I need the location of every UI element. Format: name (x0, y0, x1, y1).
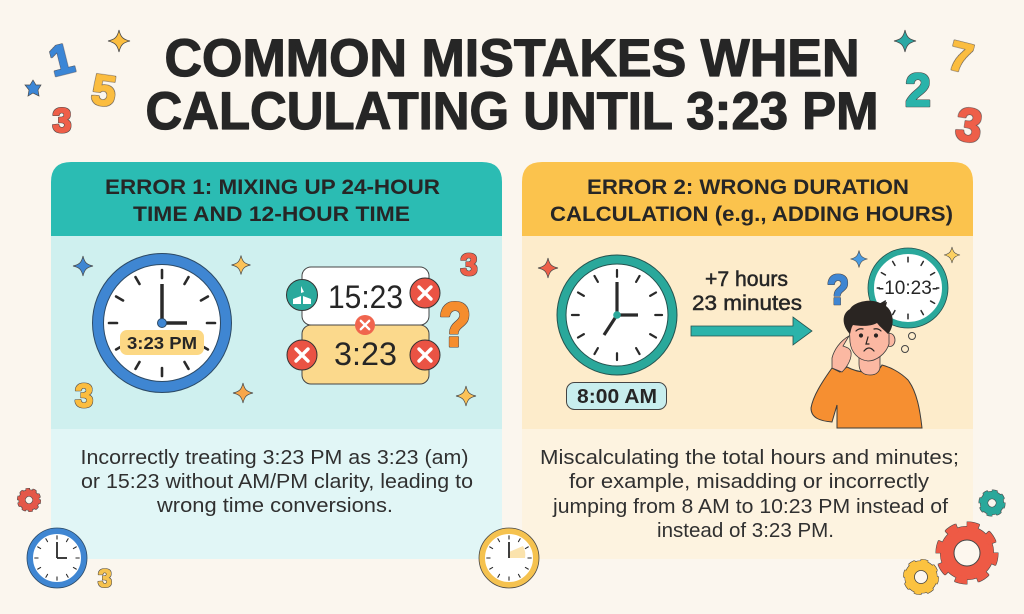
panel 1 heading (105, 176, 440, 226)
title (146, 29, 878, 141)
decorative numbers and stars, top left: 1 (44, 34, 78, 85)
panel 1 description: or 15:23 without AM/PM clarity, leading to (81, 471, 473, 493)
icon: teal gear (980, 492, 1004, 514)
icon: blue question mark: ? (827, 266, 849, 313)
person head (849, 322, 889, 361)
person hand (832, 336, 851, 372)
clock showing wrong 10:23: -10:23- (878, 278, 938, 299)
added duration label: 23 minutes (692, 292, 802, 315)
decorative numbers: 3 (460, 247, 478, 282)
panel 1 illustration background (51, 230, 502, 429)
panel 2 description (540, 447, 959, 542)
panel 2 heading: CALCULATION (e.g., ADDING HOURS) (550, 203, 953, 226)
clock showing wrong 10:23 (868, 248, 948, 328)
gold number 3, bottom left: 3 (98, 565, 112, 593)
panel 2 description: instead of 3:23 PM. (657, 520, 834, 542)
decorative numbers: 3 (75, 377, 93, 414)
title: CALCULATING UNTIL 3:23 PM (146, 82, 878, 141)
clock showing 8:00 AM start (557, 255, 677, 375)
panel 2 illustration background (522, 230, 973, 429)
panel 1 text background (51, 425, 502, 559)
panel 1 header (51, 162, 502, 236)
panel 1 description: wrong time conversions. (156, 495, 393, 517)
person face (856, 329, 881, 351)
small blue clock, bottom left (27, 528, 87, 588)
panel: error 2 (522, 162, 973, 559)
person ear (885, 334, 895, 346)
panel 2 description: for example, misadding or incorrectly (569, 471, 929, 493)
panel 2 description: Miscalculating the total hours and minutes; (540, 447, 959, 469)
decorative numbers and stars, top right: 7 (944, 32, 977, 82)
thought bubbles (902, 332, 916, 352)
3:23 card: 3:23 (334, 336, 397, 372)
panel 2 heading: ERROR 2: WRONG DURATION (587, 176, 909, 199)
small gold clock, bottom centre (479, 528, 539, 588)
decorative numbers and stars, top left: 5 (89, 66, 119, 116)
panel 2 text background (522, 425, 973, 559)
panel 1 heading: TIME AND 12-HOUR TIME (133, 203, 410, 226)
icon: wrong marks (287, 278, 440, 370)
person thinking (811, 301, 922, 428)
icon: small red gear (19, 490, 39, 510)
title: COMMON MISTAKES WHEN (164, 29, 860, 88)
icon: orange question mark: ? (439, 291, 471, 360)
decorative numbers and stars, top right: 3 (953, 97, 985, 153)
clock showing 3:23 PM: 3:23 PM (127, 333, 197, 353)
panel 1 description: Incorrectly treating 3:23 PM as 3:23 (am) (80, 447, 468, 469)
15:23 card: 15:23 (328, 279, 403, 315)
decorative numbers (75, 247, 478, 414)
panel 2 header (522, 162, 973, 236)
icon: teal book badge (286, 280, 318, 310)
decorative numbers and stars, top left (25, 30, 130, 140)
15:23 card (302, 267, 429, 325)
clock showing 3:23 PM (92, 254, 232, 392)
sparkles (73, 256, 476, 406)
panel 2 description: jumping from 8 AM to 10:23 PM instead of (552, 496, 948, 518)
arrow (691, 317, 812, 345)
decorative numbers and stars, top right (894, 30, 985, 153)
panel 1 description (80, 447, 473, 517)
3:23 card (302, 325, 429, 384)
added duration label (692, 268, 802, 315)
panel 2 heading (550, 176, 953, 226)
decorative numbers and stars, top right: 2 (905, 64, 931, 116)
panel 1 heading: ERROR 1: MIXING UP 24-HOUR (105, 176, 440, 199)
sparkles (538, 247, 960, 278)
added duration label: +7 hours (705, 268, 788, 291)
panel: error 1 (51, 162, 502, 559)
icon: large red gear (940, 526, 994, 580)
person sweater (811, 365, 922, 428)
person neck (859, 352, 880, 375)
8:00 AM label (566, 382, 666, 410)
8:00 AM label: 8:00 AM (577, 385, 657, 408)
person hair (844, 301, 893, 334)
icon: gold gear (906, 562, 936, 592)
decorative numbers and stars, top left: 3 (53, 102, 71, 140)
